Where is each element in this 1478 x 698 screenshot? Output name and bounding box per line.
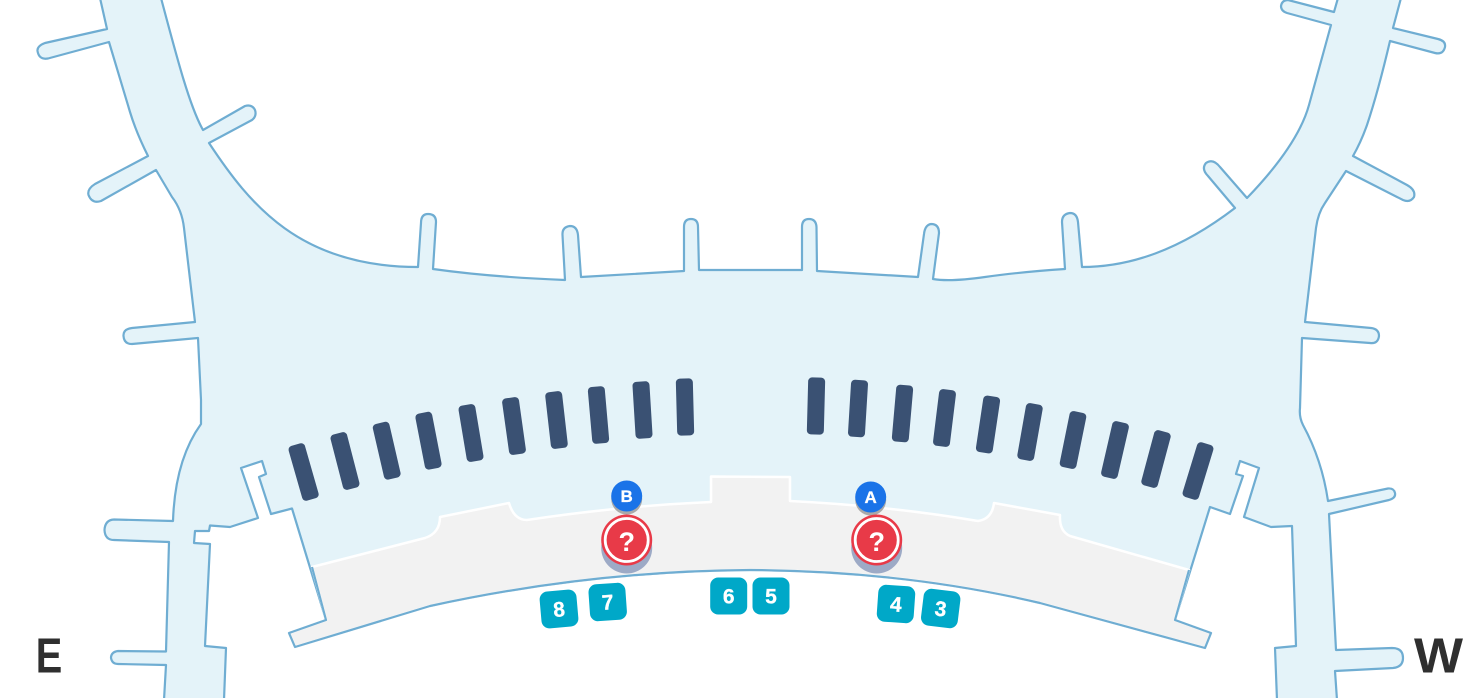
door 6: 6 bbox=[723, 586, 735, 608]
compass label east: E bbox=[36, 630, 62, 684]
marker A bbox=[855, 482, 886, 516]
marker B: B bbox=[621, 487, 633, 506]
security lanes: west group bbox=[807, 377, 1214, 501]
help icon east: ? bbox=[618, 527, 635, 557]
hall outer wall bbox=[289, 567, 1211, 648]
door 6 bbox=[710, 578, 747, 614]
help icon west: ? bbox=[868, 527, 885, 557]
door 5 bbox=[752, 578, 790, 614]
compass label west: W bbox=[1414, 630, 1464, 684]
door 7: 7 bbox=[601, 591, 614, 615]
marker A: A bbox=[865, 488, 877, 507]
security lanes: east group bbox=[288, 378, 694, 502]
landside hall floor bbox=[289, 476, 1211, 648]
help icon west bbox=[851, 514, 902, 574]
help icon east bbox=[601, 514, 652, 574]
door 5: 5 bbox=[765, 586, 777, 608]
door 8 bbox=[539, 589, 579, 629]
door 3 bbox=[920, 588, 961, 629]
door 8: 8 bbox=[552, 598, 566, 622]
door 3: 3 bbox=[933, 597, 948, 622]
door 4 bbox=[876, 584, 916, 624]
door 7 bbox=[588, 582, 627, 622]
door 4: 4 bbox=[889, 593, 903, 617]
marker B bbox=[611, 480, 642, 514]
